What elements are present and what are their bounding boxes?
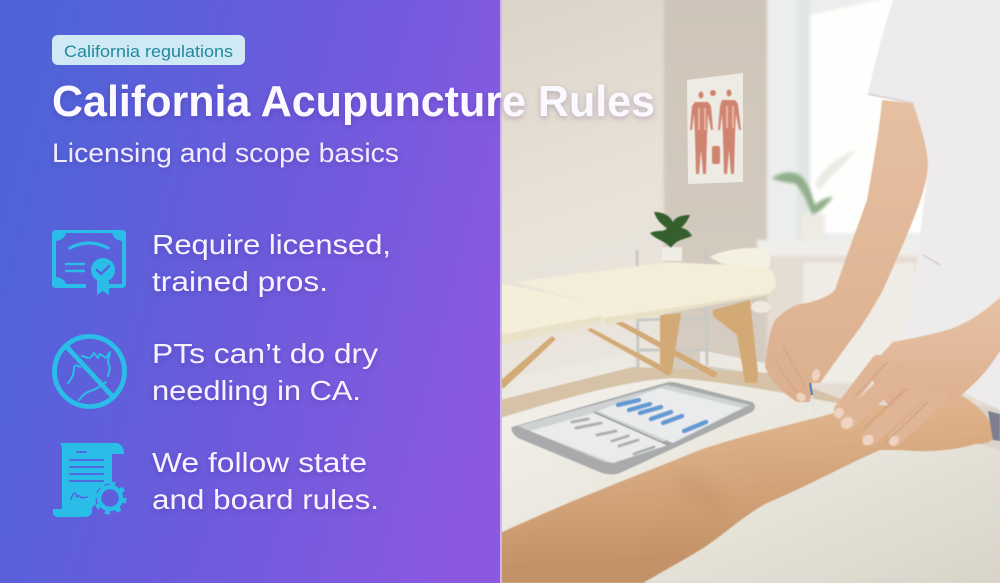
- text: require licensed: Require licensed,: [152, 229, 391, 260]
- photo edge highlight: [500, 0, 502, 583]
- wall baseboards and floor: [500, 350, 850, 425]
- icon: scroll with gear: [53, 443, 125, 517]
- wall anatomy poster: [687, 73, 743, 184]
- grey needle handles: [572, 419, 654, 454]
- icon: certificate with seal: [52, 230, 126, 295]
- therapist uniform: [868, 0, 1000, 441]
- text: we follow rules: and board rules.: [152, 484, 379, 515]
- needle tray: [512, 382, 755, 474]
- subtitle: Licensing and scope basics: [52, 138, 399, 168]
- text: PTs can't do dry needling: needling in CA.: [152, 375, 361, 406]
- acupuncture needle: [810, 383, 815, 418]
- list item: state and board rules: [53, 443, 379, 517]
- list item: licensed professionals: [52, 229, 391, 297]
- text: PTs can't do dry needling: PTs can’t do dry: [152, 338, 378, 369]
- panel: photo of acupuncture treatment: [480, 0, 1000, 583]
- houseplant behind table: [650, 212, 692, 261]
- massage table stand and legs: [500, 250, 771, 389]
- tag: California regulations: [52, 35, 245, 65]
- treatment table sheet: [500, 378, 1000, 583]
- massage table pads and headrest: [500, 248, 776, 345]
- icon: prohibited hand: [54, 336, 124, 406]
- patient arm and hand: [500, 395, 995, 583]
- panel: gradient text panel: [0, 0, 500, 583]
- tag: California regulations: California regulations: [64, 42, 233, 61]
- title: California Acupuncture Rules: [52, 77, 655, 126]
- wall right of corner: [664, 0, 770, 400]
- therapist upper arm and needle hand: [765, 100, 928, 403]
- window frame and glass: [757, 0, 1000, 406]
- text: we follow rules: We follow state: [152, 447, 367, 478]
- list item: dry needling restriction: [54, 336, 378, 406]
- therapist second hand on the wrist: [832, 293, 1000, 448]
- blue needle handles: [618, 400, 706, 431]
- text: require licensed: trained pros.: [152, 266, 328, 297]
- windowsill plant and pot: [772, 150, 855, 240]
- wall left of corner: [480, 0, 666, 400]
